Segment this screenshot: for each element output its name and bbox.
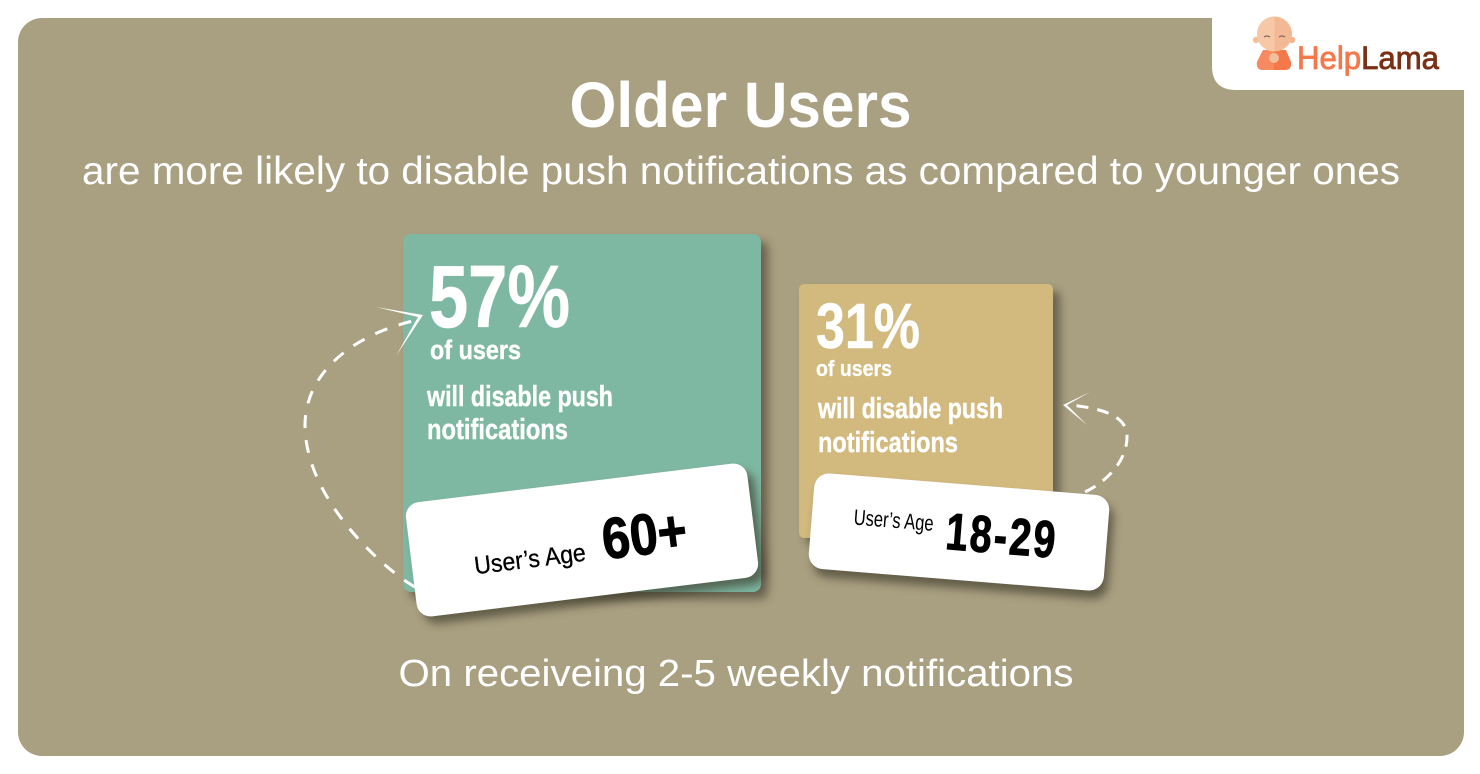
logo tab [1212, 0, 1464, 90]
text: will disable push notifications: will disable push [426, 381, 613, 413]
text: will disable push notifications: notifications [427, 414, 568, 446]
title: Older Users [570, 69, 912, 141]
text: will disable push notifications: will disable push [817, 393, 1003, 425]
age tag: 18-29 [807, 472, 1115, 600]
logo wordmark: HelpLama [1297, 40, 1439, 76]
text: will disable push notifications [817, 393, 1003, 459]
text: User's Age: User’s Age [473, 539, 587, 580]
stat: 31%: 31% [816, 290, 920, 362]
panel: 60+ card [403, 234, 768, 599]
value: 60+: 60+ [598, 497, 690, 572]
arrow: right dashed curve to 18-29 card [1063, 392, 1127, 492]
text: User's Age: User’s Age [853, 505, 935, 536]
stat: 57%: 57% [429, 247, 570, 346]
text: of users: of users [816, 356, 892, 381]
text: of users: of users [430, 335, 521, 365]
age tag: 60+ [404, 461, 767, 626]
text: will disable push notifications: notifications [818, 427, 958, 459]
arrow: left dashed curve to 57% [305, 307, 423, 587]
text: will disable push notifications [426, 381, 613, 446]
value: 18-29: 18-29 [944, 503, 1060, 570]
panel: 18-29 card [799, 284, 1060, 545]
icon: monk mascot [1253, 16, 1295, 70]
footer note: On receiveing 2-5 weekly notifications [398, 653, 1074, 695]
subtitle: are more likely to disable push notifications as compared to younger ones [82, 150, 1400, 193]
